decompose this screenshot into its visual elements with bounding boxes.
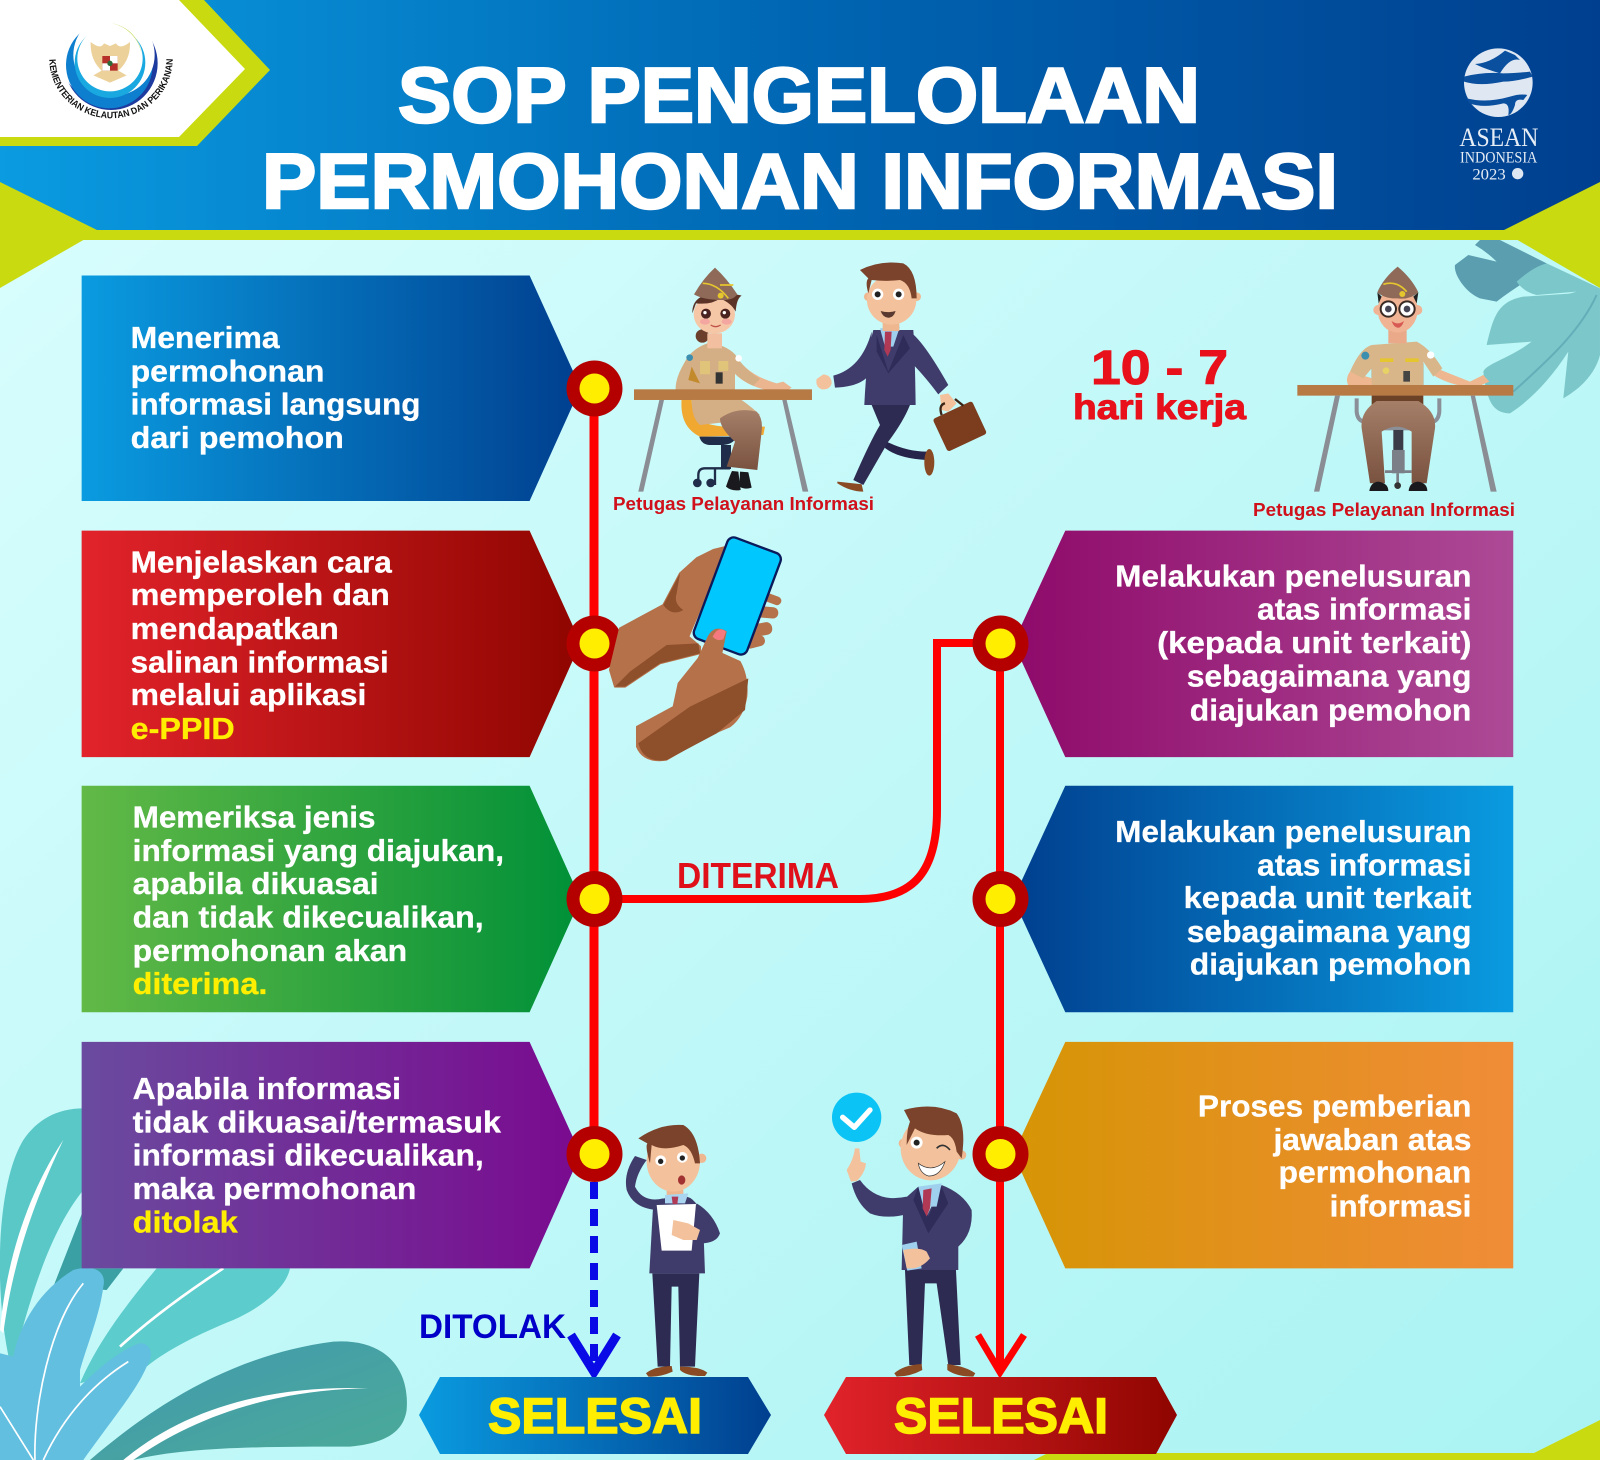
panel: step 3 check information: Memeriksa jenis: [133, 801, 376, 835]
illustration: hands holding phone: [610, 535, 783, 761]
illustration: confused man holding paper: [626, 1125, 720, 1377]
duration: 10 - 7 hari kerja: [1073, 342, 1247, 427]
arrow: rejected dashed to finish: [571, 1182, 617, 1372]
duration: 10 - 7 hari kerja: hari kerja: [1073, 388, 1247, 427]
panel: step 4 rejected: ditolak: [133, 1206, 239, 1240]
end badge: rejected selesai: SELESAI: [488, 1388, 702, 1444]
panel: step 7 give answer: jawaban atas: [1272, 1123, 1471, 1157]
flow line: left trunk: [590, 388, 598, 1154]
end badge: rejected selesai: [419, 1377, 771, 1454]
duration: 10 - 7 hari kerja: 10 - 7: [1091, 342, 1228, 395]
caption: officer 1: Petugas Pelayanan Informasi: [613, 493, 874, 514]
arrow: right trunk to finish: [978, 643, 1024, 1372]
panel: step 5 trace information: atas informasi: [1257, 592, 1471, 626]
panel: step 3 check information: dan tidak dikecualikan,: [133, 901, 484, 935]
panel: step 7 give answer: permohonan: [1279, 1156, 1471, 1190]
panel: step 2 explain how to obtain: mendapatkan: [131, 612, 339, 646]
label: ditolak: DITOLAK: [419, 1308, 566, 1346]
illustration: female officer at desk: [634, 268, 812, 492]
logo: ASEAN Indonesia 2023: ASEAN: [1459, 122, 1538, 152]
illustration: visitor walking with briefcase: [816, 262, 987, 492]
caption: officer 2: Petugas Pelayanan Informasi: [1253, 499, 1515, 520]
panel: step 1 receive request: Menerima: [131, 321, 281, 355]
panel: step 3 check information: apabila dikuasai: [133, 867, 379, 901]
panel: step 6 trace to unit: kepada unit terkait: [1184, 881, 1471, 915]
end badge: accepted selesai: SELESAI: [894, 1388, 1108, 1444]
flow line: accepted connector: [594, 643, 1000, 899]
panel: step 3 check information: diterima.: [133, 967, 267, 1001]
title: PERMOHONAN INFORMASI: [262, 137, 1338, 225]
title: SOP PENGELOLAAN: [398, 51, 1200, 139]
panel: step 1 receive request: informasi langsung: [131, 387, 420, 421]
logo: Kementerian Kelautan dan Perikanan: KEMENTERIAN KELAUTAN DAN PERIKANAN: [49, 59, 173, 118]
panel: step 3 check information: informasi yang diajukan,: [133, 834, 504, 868]
panel: step 1 receive request: dari pemohon: [131, 421, 344, 455]
illustration: happy man pointing: [847, 1107, 975, 1377]
panel: step 4 rejected: [82, 1042, 581, 1268]
panel: step 5 trace information: (kepada unit terkait): [1157, 626, 1471, 660]
panel: step 6 trace to unit: diajukan pemohon: [1190, 947, 1471, 981]
panel: step 6 trace to unit: atas informasi: [1257, 849, 1471, 883]
title: [262, 51, 1338, 225]
panel: step 2 explain how to obtain: Menjelaskan cara: [131, 545, 393, 579]
panel: step 5 trace information: diajukan pemohon: [1190, 693, 1471, 727]
logo: ASEAN Indonesia 2023: [1459, 48, 1538, 183]
panel: step 2 explain how to obtain: melalui aplikasi: [131, 678, 366, 712]
panel: step 6 trace to unit: sebagaimana yang: [1187, 915, 1471, 949]
panel: step 7 give answer: informasi: [1330, 1189, 1471, 1223]
panel: step 2 explain how to obtain: memperoleh dan: [131, 578, 390, 612]
panel: step 4 rejected: informasi dikecualikan,: [133, 1138, 484, 1172]
panel: step 1 receive request: permohonan: [131, 355, 324, 389]
panel: step 2 explain how to obtain: e-PPID: [131, 712, 235, 746]
bottom right lime corner: [1034, 1420, 1600, 1460]
logo: Kementerian Kelautan dan Perikanan: [49, 24, 173, 118]
panel: step 2 explain how to obtain: salinan informasi: [131, 645, 389, 679]
panel: step 5 trace information: [1013, 531, 1513, 757]
decorative leaves top right: [1455, 240, 1600, 413]
panel: step 7 give answer: Proses pemberian: [1198, 1089, 1471, 1123]
panel: step 6 trace to unit: Melakukan penelusuran: [1115, 815, 1471, 849]
panel: step 4 rejected: Apabila informasi: [133, 1072, 401, 1106]
logo plate: [0, 0, 270, 146]
panel: step 5 trace information: sebagaimana yang: [1187, 660, 1471, 694]
panel: step 7 give answer: [1013, 1042, 1513, 1268]
panel: step 3 check information: [82, 786, 581, 1012]
decorative leaves bottom left: [0, 1108, 407, 1460]
icon: blue check mark: [832, 1093, 881, 1142]
panel: step 4 rejected: maka permohonan: [133, 1172, 416, 1206]
end badge: accepted selesai: [824, 1377, 1177, 1454]
panel: step 4 rejected: tidak dikuasai/termasuk: [133, 1106, 502, 1140]
panel: step 6 trace to unit: [1013, 786, 1513, 1012]
header band: [0, 0, 1600, 288]
logo: ASEAN Indonesia 2023: INDONESIA: [1460, 150, 1538, 167]
label: diterima: DITERIMA: [677, 855, 839, 896]
logo: ASEAN Indonesia 2023: 2023: [1472, 166, 1506, 183]
panel: step 5 trace information: Melakukan penelusuran: [1115, 560, 1471, 594]
panel: step 2 explain how to obtain: [82, 531, 581, 757]
flow nodes: [566, 360, 1028, 1182]
panel: step 1 receive request: [82, 276, 581, 501]
illustration: male officer at desk: [1297, 267, 1513, 492]
panel: step 3 check information: permohonan akan: [133, 934, 407, 968]
